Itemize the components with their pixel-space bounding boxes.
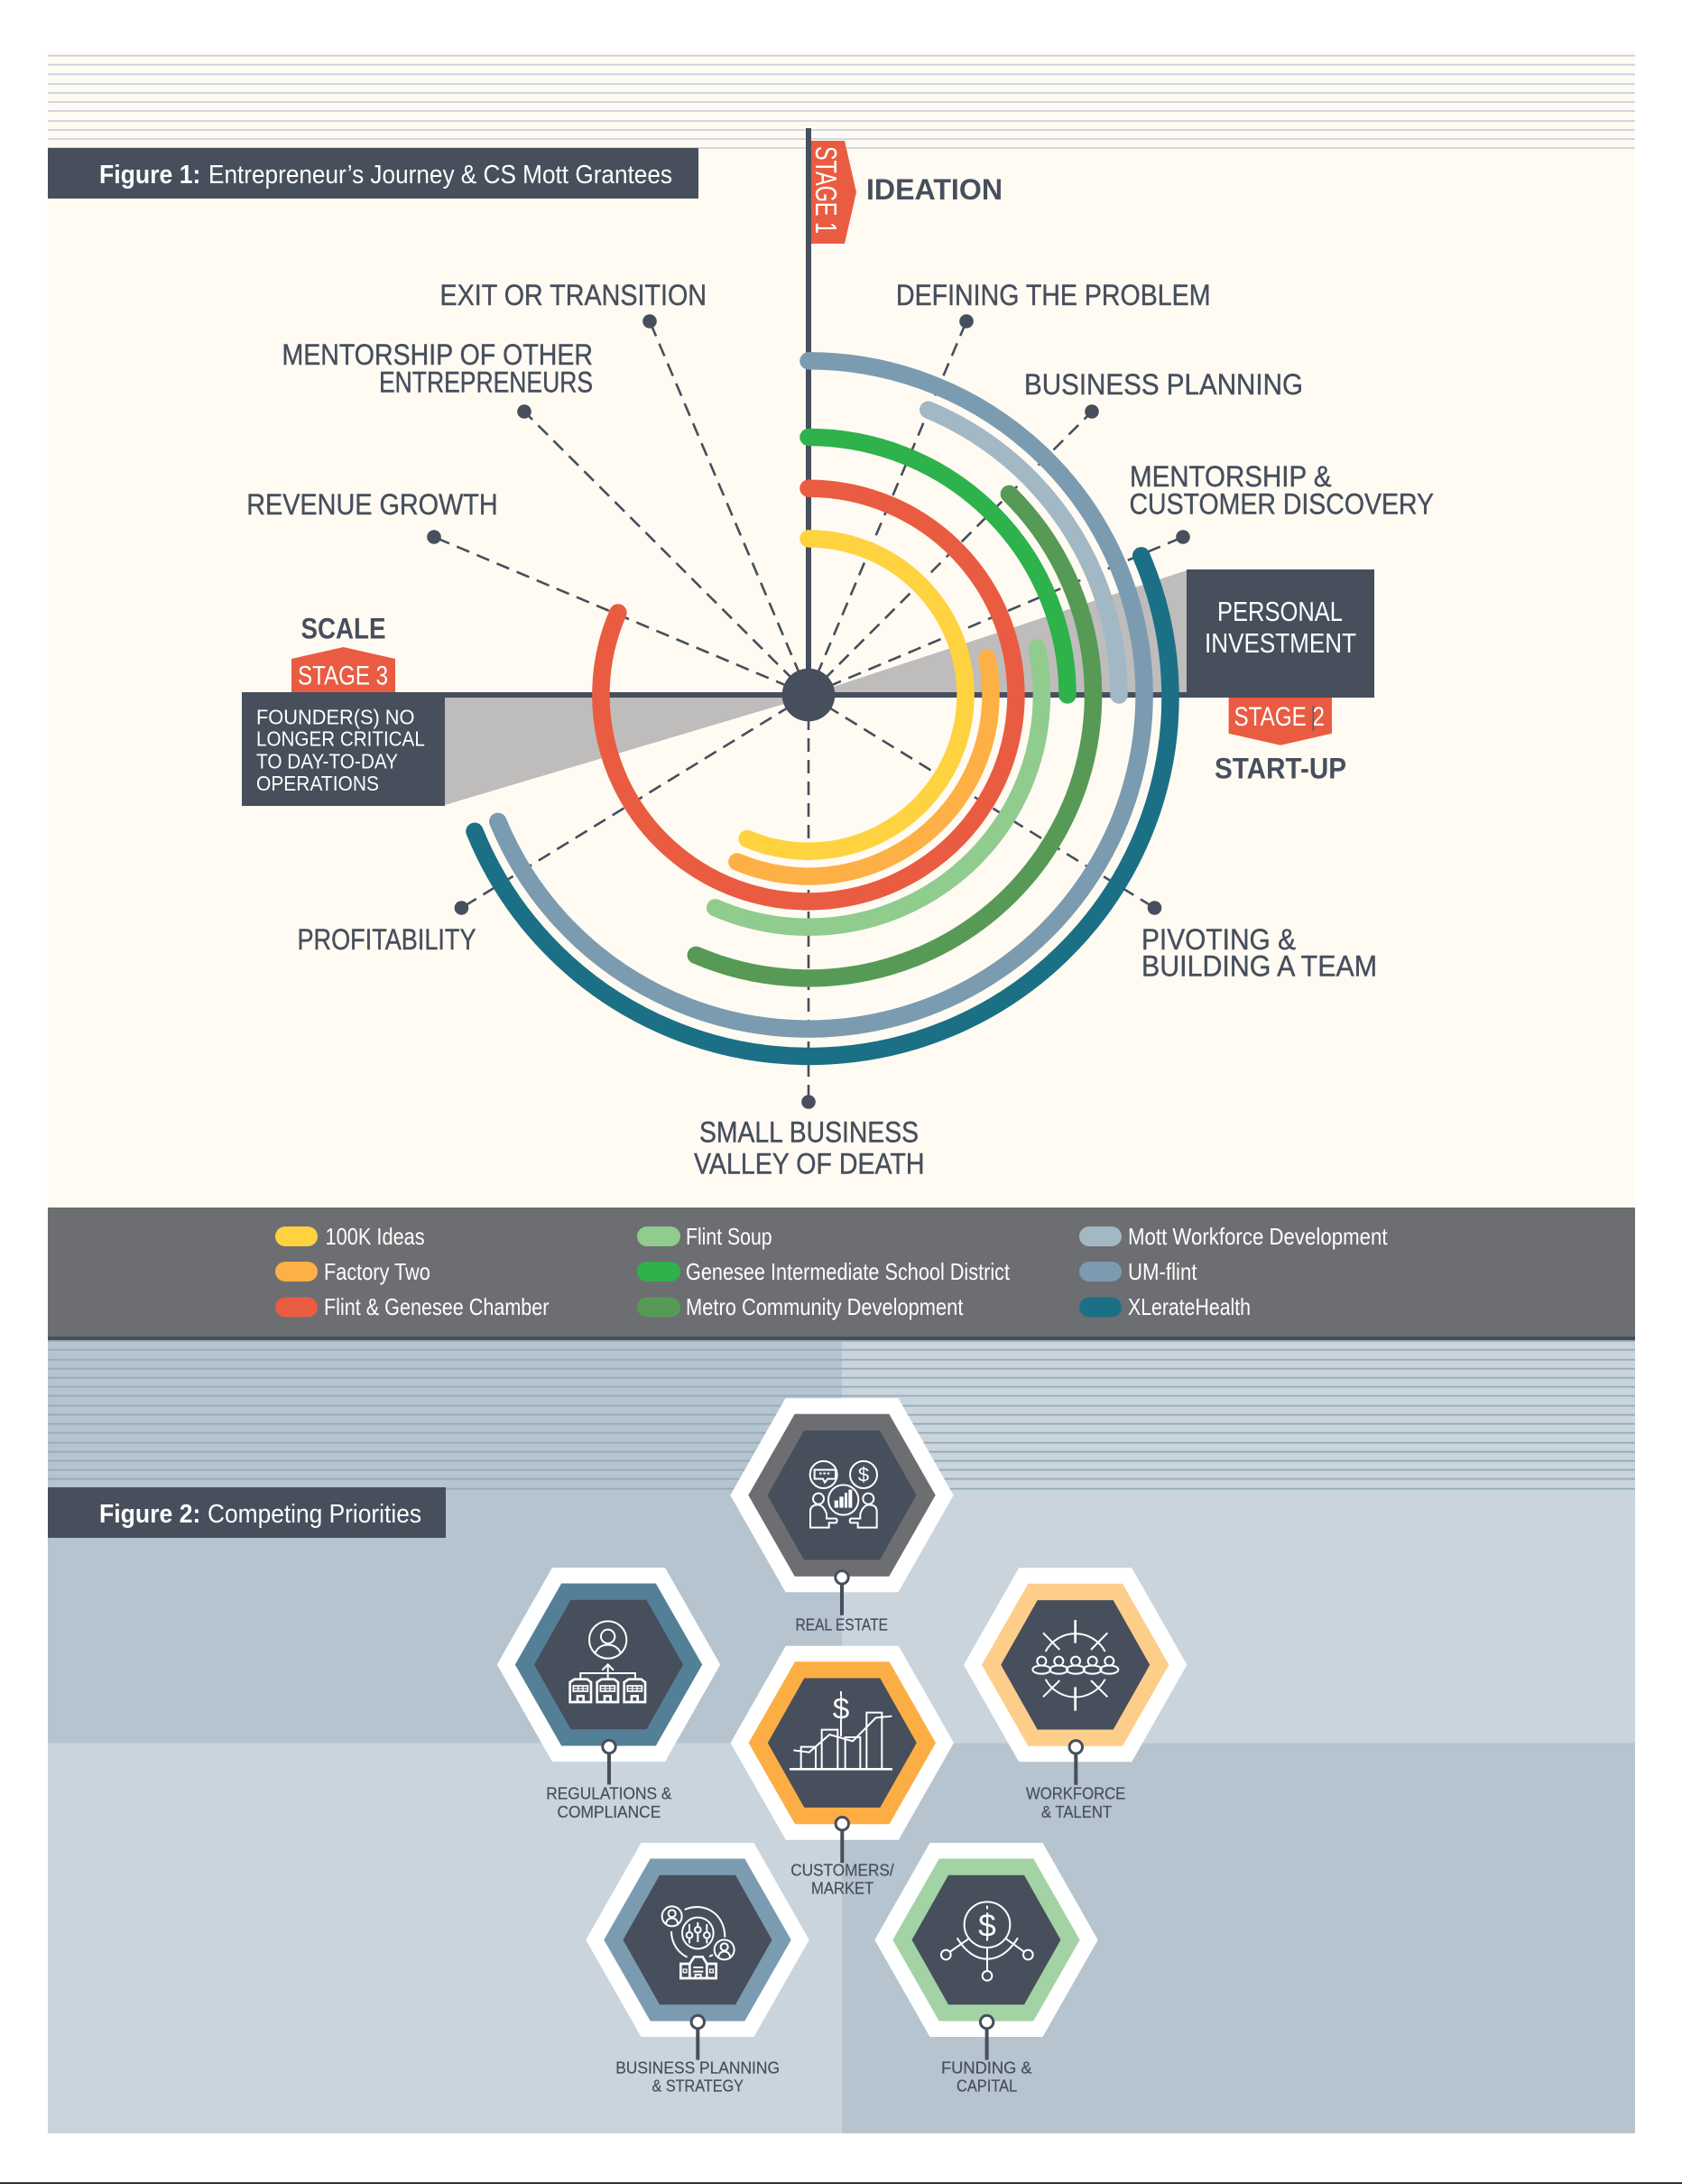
hexagon: workforce and talent bbox=[964, 1568, 1187, 1821]
milestone label: small business valley of death: VALLEY OF DEATH bbox=[694, 1148, 924, 1180]
icon: meeting with finance and chart: $ bbox=[858, 1464, 869, 1486]
legend item: Factory Two bbox=[275, 1258, 430, 1285]
icon: dollar coin with branches bbox=[941, 1902, 1033, 1981]
milestone label: pivoting and building a team: PIVOTING & bbox=[1141, 923, 1296, 956]
icon: person over three buildings bbox=[570, 1621, 645, 1702]
panel: figure 1 journey bbox=[48, 51, 1635, 1208]
icon: dollar coin with branches: $ bbox=[978, 1908, 996, 1943]
legend item: 100K Ideas: 100K Ideas bbox=[325, 1223, 425, 1250]
legend item: Metro Community Development: Metro Community Development bbox=[686, 1293, 964, 1320]
label: business planning and strategy bbox=[615, 2059, 780, 2096]
milestone label: mentorship and customer discovery bbox=[1130, 460, 1434, 520]
stage 2 flag: STAGE 2 bbox=[1234, 702, 1325, 732]
stage 3 flag bbox=[291, 647, 395, 692]
callout box: founders no longer critical bbox=[242, 692, 445, 806]
hexagon: funding and capital bbox=[874, 1843, 1098, 2096]
callout box: founders no longer critical: OPERATIONS bbox=[256, 772, 379, 795]
stage 3 flag: STAGE 3 bbox=[298, 662, 388, 691]
label: regulations and compliance: COMPLIANCE bbox=[558, 1803, 661, 1821]
label: funding and capital: CAPITAL bbox=[957, 2078, 1017, 2096]
radial arc chart: grantee coverage bbox=[475, 361, 1170, 1056]
legend item: Genesee Intermediate School District: Genesee Intermediate School District bbox=[686, 1258, 1011, 1285]
icon: rising bar chart with dollar bbox=[790, 1691, 892, 1769]
legend item: UM-flint bbox=[1079, 1258, 1197, 1285]
title: figure 2: Competing Priorities bbox=[208, 1500, 421, 1529]
milestone label: revenue growth: REVENUE GROWTH bbox=[246, 488, 498, 521]
legend item: 100K Ideas bbox=[275, 1223, 425, 1250]
callout box: founders no longer critical: FOUNDER(S) NO bbox=[256, 706, 415, 729]
arc: 100K Ideas bbox=[747, 539, 966, 851]
milestone label: profitability: PROFITABILITY bbox=[298, 923, 476, 956]
label: customers and market: MARKET bbox=[811, 1880, 873, 1898]
label: business planning and strategy: & STRATEGY bbox=[652, 2078, 744, 2096]
label: funding and capital: FUNDING & bbox=[941, 2059, 1032, 2078]
wedge: founders no longer critical bbox=[445, 697, 809, 805]
milestone label: exit or transition: EXIT OR TRANSITION bbox=[440, 279, 707, 311]
legend item: Flint Soup: Flint Soup bbox=[686, 1223, 772, 1250]
milestone label: mentorship of other entrepreneurs: ENTREPRENEURS bbox=[379, 366, 593, 399]
legend item: Flint Soup bbox=[637, 1223, 772, 1250]
legend item: XLerateHealth bbox=[1079, 1293, 1251, 1320]
milestone label: pivoting and building a team: BUILDING A TEAM bbox=[1141, 949, 1377, 982]
label: workforce and talent: WORKFORCE bbox=[1026, 1785, 1125, 1803]
label: real estate: REAL ESTATE bbox=[796, 1616, 888, 1634]
dashed spokes with end dots bbox=[427, 314, 1190, 1109]
label: customers and market: CUSTOMERS/ bbox=[790, 1861, 894, 1879]
milestone label: small business valley of death bbox=[694, 1115, 924, 1180]
horizontal stage axis bbox=[445, 692, 1187, 698]
heading: start-up: START-UP bbox=[1215, 753, 1346, 785]
title: figure 2: Figure 2: bbox=[99, 1500, 200, 1529]
label: customers and market bbox=[790, 1861, 894, 1898]
milestone label: small business valley of death: SMALL BUSINESS bbox=[699, 1115, 919, 1148]
milestone label: mentorship of other entrepreneurs: MENTORSHIP OF OTHER bbox=[282, 338, 593, 371]
label: funding and capital bbox=[941, 2059, 1032, 2096]
arc: UM-flint bbox=[498, 361, 1144, 1029]
vertical stage axis bbox=[806, 128, 811, 695]
hexagon: regulations and compliance bbox=[497, 1568, 720, 1821]
label: workforce and talent bbox=[1026, 1785, 1125, 1821]
label: regulations and compliance bbox=[546, 1785, 671, 1821]
milestone label: defining the problem: DEFINING THE PROBLEM bbox=[896, 279, 1211, 311]
hexagon: customers and market bbox=[731, 1646, 954, 1898]
milestone label: mentorship of other entrepreneurs bbox=[282, 338, 593, 399]
label: business planning and strategy: BUSINESS PLANNING bbox=[615, 2059, 780, 2078]
legend item: XLerateHealth: XLerateHealth bbox=[1128, 1293, 1251, 1320]
arc: Genesee Intermediate School District bbox=[809, 437, 1067, 695]
title: figure 1: Figure 1: bbox=[99, 161, 200, 190]
stage 1 flag: STAGE 1 bbox=[809, 146, 843, 234]
legend item: UM-flint: UM-flint bbox=[1128, 1258, 1197, 1285]
heading: scale: SCALE bbox=[301, 612, 386, 644]
title: figure 2 bbox=[48, 1487, 446, 1538]
arc: Flint Soup bbox=[716, 648, 1041, 927]
legend item: Factory Two: Factory Two bbox=[324, 1258, 430, 1285]
icon: team in target bbox=[1032, 1620, 1118, 1711]
bottom page rule bbox=[0, 2182, 1682, 2184]
milestone label: business planning: BUSINESS PLANNING bbox=[1024, 368, 1303, 401]
callout box: founders no longer critical: LONGER CRITICAL bbox=[256, 727, 425, 751]
legend band bbox=[48, 1208, 1635, 1340]
callout box: personal investment: INVESTMENT bbox=[1205, 628, 1356, 659]
panel: figure 2 competing priorities bbox=[48, 1340, 1635, 2133]
callout box: personal investment bbox=[1187, 569, 1374, 698]
legend item: Flint & Genesee Chamber: Flint & Genesee Chamber bbox=[324, 1293, 550, 1320]
arc: Mott Workforce Development bbox=[929, 410, 1119, 695]
icon: rising bar chart with dollar: $ bbox=[833, 1693, 849, 1726]
hexagon: real estate bbox=[730, 1398, 954, 1634]
milestone label: mentorship and customer discovery: MENTORSHIP & bbox=[1130, 460, 1332, 493]
arc: Flint & Genesee Chamber bbox=[601, 488, 1016, 902]
callout box: founders no longer critical: TO DAY-TO-DAY bbox=[256, 750, 398, 773]
milestone label: mentorship and customer discovery: CUSTOMER DISCOVERY bbox=[1130, 487, 1434, 520]
legend item: Mott Workforce Development: Mott Workforce Development bbox=[1128, 1223, 1388, 1250]
hexagon: business planning and strategy bbox=[586, 1843, 809, 2096]
label: workforce and talent: & TALENT bbox=[1041, 1803, 1112, 1821]
callout box: personal investment: PERSONAL bbox=[1217, 597, 1343, 627]
center hub bbox=[782, 669, 835, 721]
wedge: personal investment bbox=[809, 570, 1187, 695]
title: figure 1 bbox=[48, 148, 698, 199]
arc: Metro Community Development bbox=[696, 494, 1094, 978]
stage 1 flag bbox=[809, 141, 856, 244]
icon: meeting with finance and chart bbox=[810, 1461, 877, 1528]
arc: Factory Two bbox=[737, 658, 991, 876]
title: figure 1: Entrepreneur’s Journey & CS Mott Grantees bbox=[208, 161, 672, 190]
heading: ideation: IDEATION bbox=[866, 173, 1003, 206]
milestone label: pivoting and building a team bbox=[1141, 923, 1377, 982]
label: regulations and compliance: REGULATIONS & bbox=[546, 1785, 671, 1803]
arc: XLerateHealth bbox=[475, 556, 1170, 1056]
stage 2 flag bbox=[1229, 698, 1332, 745]
icon: people, sliders and building bbox=[662, 1906, 735, 1978]
